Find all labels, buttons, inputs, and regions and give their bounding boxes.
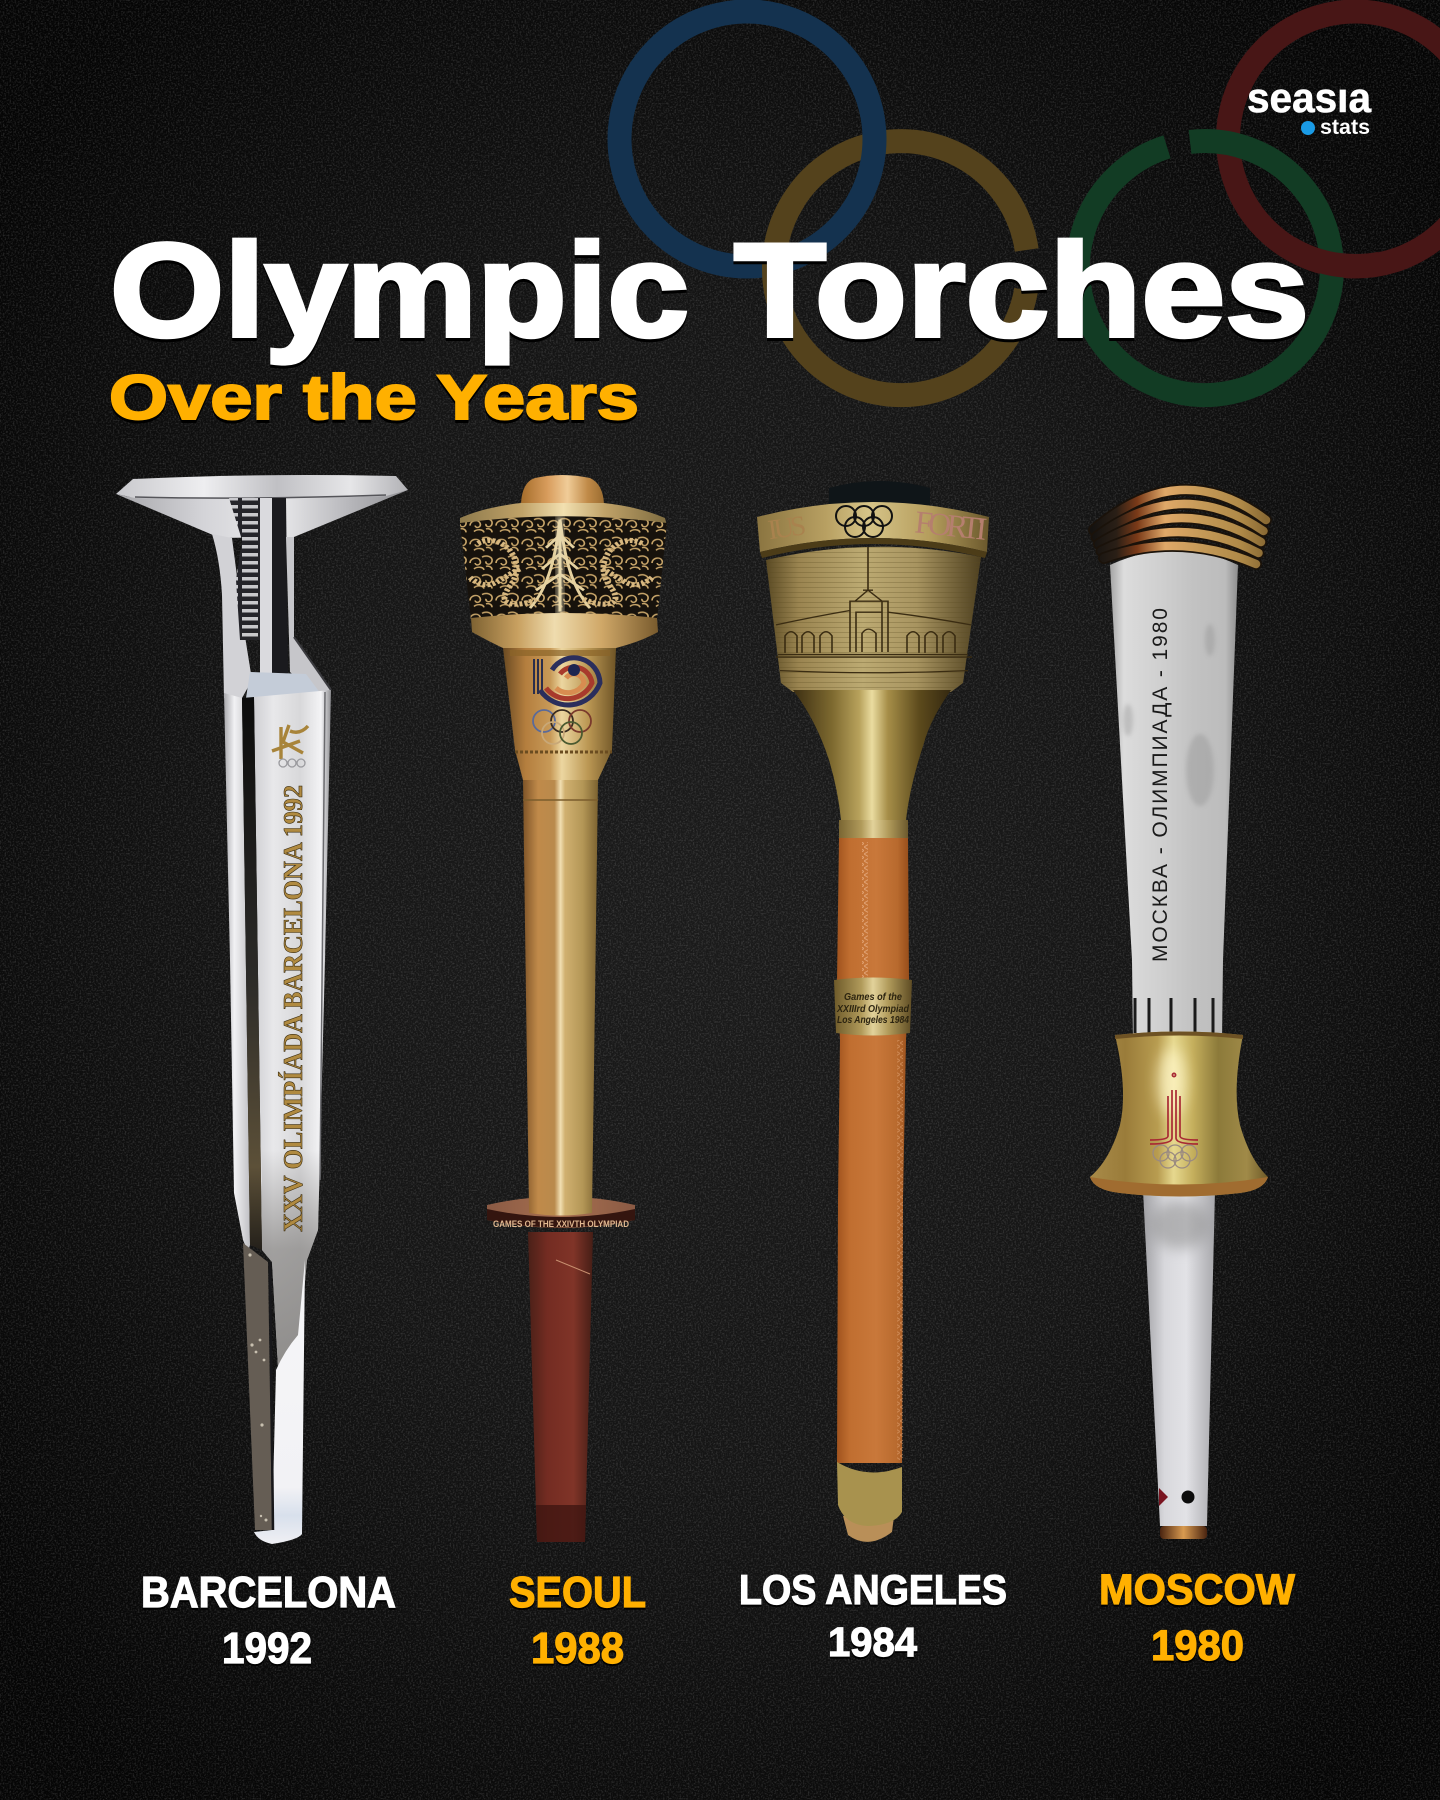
- label: Moscow: [1099, 1566, 1295, 1670]
- dark slot: [272, 498, 288, 673]
- funnel: [793, 690, 951, 820]
- textured lower panel: [243, 1243, 272, 1530]
- olympic rings watermark: [620, 12, 1440, 395]
- label: Seoul: 1988: [531, 1624, 624, 1673]
- label: Barcelona: [141, 1568, 396, 1673]
- engraved ring: [834, 978, 912, 1036]
- black burner top: [829, 481, 930, 505]
- upper silver cone: [1110, 550, 1238, 1040]
- dragon engraved band: [460, 516, 667, 620]
- ring: red overlap: [1290, 248, 1380, 266]
- torch: Barcelona 1992: [116, 475, 408, 1544]
- end cap: [843, 1516, 894, 1542]
- leather grip: [837, 838, 909, 1463]
- Seoul games emblem: [534, 658, 600, 705]
- engraved torch text: XXV OLIMPÍADA BARCELONA 1992: [278, 785, 308, 1232]
- engraved cyrillic text: МОСКВА - ОЛИМПИАДА - 1980: [1149, 608, 1172, 962]
- title: [110, 217, 1309, 365]
- ring: green: [1078, 141, 1332, 395]
- label: Seoul: [509, 1568, 646, 1673]
- label: Seoul: SEOUL: [509, 1568, 646, 1617]
- Moscow 1980 emblem: [1150, 1073, 1198, 1144]
- lower white end: [254, 1260, 305, 1544]
- vent hole: [1182, 1490, 1194, 1504]
- ring text: XXIIIrd Olympiad: [836, 1003, 909, 1015]
- red mark: [1159, 1488, 1168, 1506]
- coliseum engraving: [776, 547, 972, 673]
- torch: Los Angeles 1984: [757, 481, 989, 1542]
- label: Los Angeles: [739, 1566, 1007, 1665]
- motto text left: IUS: [766, 510, 808, 546]
- top knob: [521, 475, 604, 504]
- label: Moscow: 1980: [1151, 1622, 1244, 1670]
- ring: red: [1228, 12, 1440, 266]
- collar: [839, 820, 908, 838]
- torch: Seoul 1988: [460, 475, 667, 1542]
- label: Los Angeles: LOS ANGELES: [739, 1566, 1007, 1613]
- neck left: [212, 534, 252, 698]
- ring text: [836, 991, 909, 1026]
- copper end ring: [1160, 1526, 1207, 1539]
- motto text: FORTI: [913, 503, 989, 547]
- torch head funnel: [116, 490, 408, 538]
- motto band: [757, 502, 989, 552]
- wear marks: [1123, 624, 1215, 806]
- bronze cup: [766, 547, 981, 692]
- right wall of opening: [286, 537, 331, 698]
- disc guard: [487, 1196, 635, 1229]
- subtitle: Over the Years: [109, 363, 639, 433]
- threaded top: [1094, 490, 1266, 564]
- Barcelona emblem: [272, 725, 308, 767]
- torch head rim: [116, 475, 408, 499]
- ring: yellow: [774, 141, 1027, 395]
- main face: [254, 690, 331, 1367]
- label: Los Angeles: 1984: [828, 1619, 917, 1665]
- lower shaft mottling: [1150, 1201, 1210, 1249]
- Olympic rings on Seoul torch: [533, 710, 591, 744]
- band rings: [836, 506, 892, 537]
- title: Torches: [734, 217, 1309, 365]
- lower silver shaft: [1143, 1190, 1215, 1526]
- disc inscription: GAMES OF THE XXIVTH OLYMPIAD: [493, 1219, 629, 1229]
- center tube: [260, 498, 272, 675]
- ring: blue: [620, 12, 874, 266]
- logo: seasia stats: [1248, 89, 1372, 135]
- vent slots: [1135, 998, 1213, 1033]
- ring: yellow overlap: [774, 200, 794, 300]
- logo wordmark: seasia: [1247, 74, 1372, 121]
- opening floor: [246, 672, 321, 698]
- ring text: Los Angeles 1984: [837, 1014, 909, 1026]
- labels: [141, 1566, 1295, 1673]
- ring text: Games of the: [844, 991, 902, 1003]
- bell guard: [1090, 1032, 1268, 1196]
- label: Barcelona: BARCELONA: [141, 1568, 396, 1617]
- notched inner rib: [229, 498, 260, 640]
- brass end band: [837, 1462, 902, 1526]
- shoulder: [460, 503, 667, 526]
- label: Barcelona: 1992: [222, 1624, 312, 1673]
- label: Moscow: MOSCOW: [1099, 1566, 1295, 1614]
- stitching: [862, 842, 868, 978]
- leather handle: [528, 1232, 593, 1542]
- logo sub-label: stats: [1320, 116, 1370, 139]
- shaft: [523, 780, 598, 1216]
- left strip: [224, 693, 250, 1252]
- lower rim: [471, 613, 658, 648]
- logo blue dot: [1301, 121, 1315, 135]
- neck: [503, 648, 616, 780]
- emblem rings: [1153, 1145, 1197, 1168]
- title: Olympic: [110, 217, 689, 365]
- black stripe: [242, 697, 262, 1250]
- torch: Moscow 1980: [1090, 490, 1268, 1539]
